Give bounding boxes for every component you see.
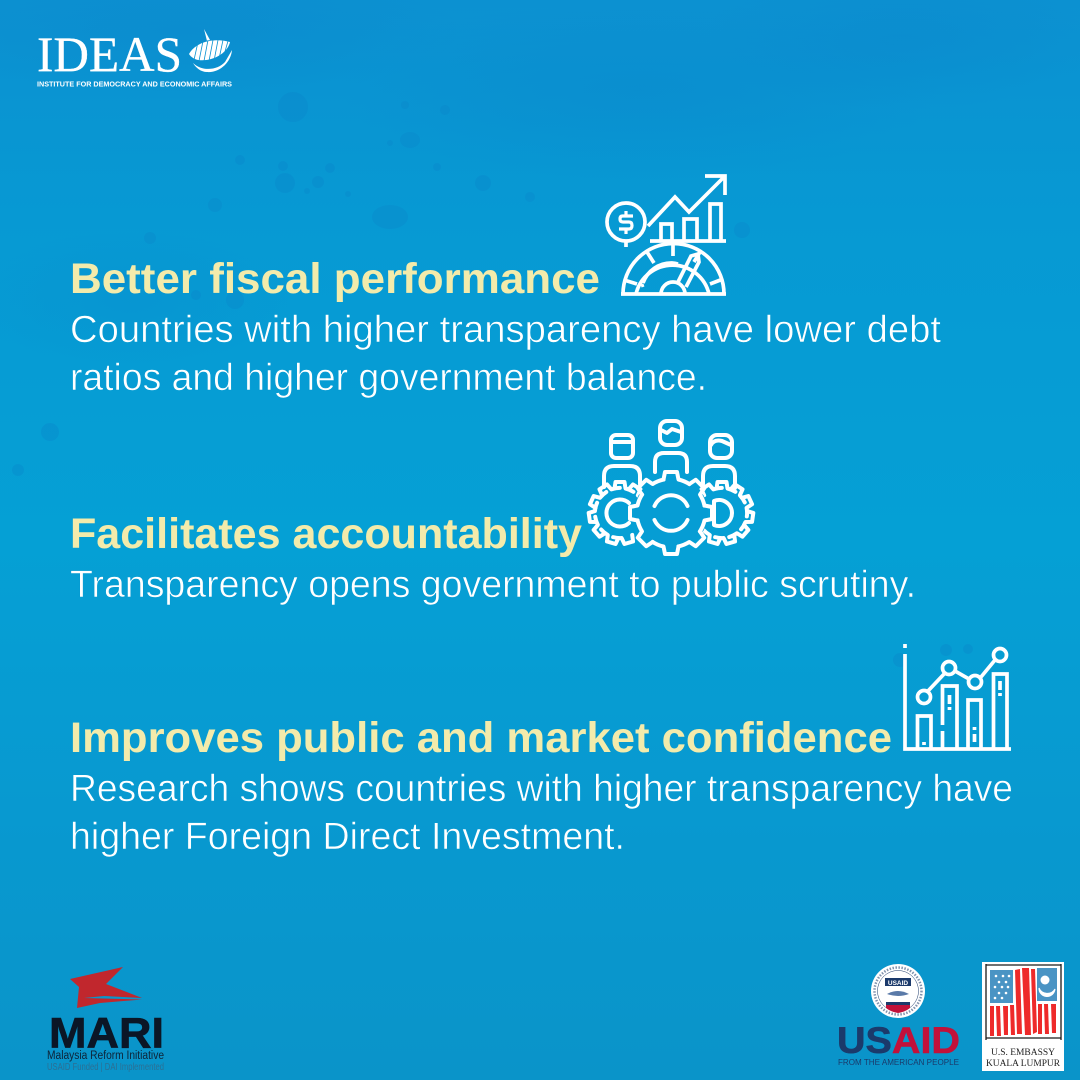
logo emblem (189, 29, 232, 72)
subtitle: Malaysia Reform Initiative (47, 1050, 164, 1062)
body: Transparency opens government to public scrutiny. (70, 564, 916, 606)
heading: Improves public and market confidence (70, 714, 892, 762)
tagline: FROM THE AMERICAN PEOPLE (838, 1057, 959, 1067)
body line 1: Countries with higher transparency have lower debt (70, 309, 941, 351)
heading: Facilitates accountability (70, 510, 582, 558)
trend line (928, 660, 995, 691)
dollar coin (607, 203, 645, 247)
gauge (621, 243, 726, 294)
wordmark: USAID (837, 1020, 960, 1061)
logo: U.S. Embassy Kuala Lumpur (982, 962, 1064, 1071)
icon: line and bar chart (905, 644, 1011, 749)
bar marks (924, 681, 1000, 745)
left person (604, 435, 640, 487)
logo: IDEAS (37, 26, 232, 88)
logo: USAID (837, 964, 960, 1067)
centre person (655, 421, 687, 472)
embassy name line 2: KUALA LUMPUR (986, 1059, 1061, 1069)
icon: money growth and gauge (607, 176, 726, 294)
heading: Better fiscal performance (70, 255, 600, 303)
icon: team and gears (587, 421, 756, 555)
bars (650, 204, 726, 241)
seal: USAID (888, 980, 908, 987)
body line 2: higher Foreign Direct Investment. (70, 816, 625, 858)
embassy name line 1: U.S. EMBASSY (991, 1048, 1055, 1058)
section 2: facilitates accountability (70, 510, 916, 606)
right gear (700, 480, 756, 547)
wordmark: MARI (49, 1010, 164, 1058)
flag artwork (986, 964, 1061, 1040)
rising arrow (648, 176, 725, 226)
bars (918, 674, 1007, 749)
logo tagline: INSTITUTE FOR DEMOCRACY AND ECONOMIC AFFAIRS (37, 80, 232, 88)
logo: MARI (47, 967, 164, 1073)
left gear (587, 480, 648, 547)
right person (703, 435, 735, 488)
section 1: better fiscal performance (70, 255, 941, 399)
logo: IDEAS: IDEAS (37, 26, 182, 82)
body line 2: ratios and higher government balance. (70, 357, 707, 399)
funding line: USAID Funded | DAI Implemented (47, 1062, 164, 1073)
body line 1: Research shows countries with higher transparency have (70, 768, 1013, 810)
centre gear (629, 471, 713, 555)
axes (905, 644, 1011, 749)
section 3: improves public and market confidence (70, 714, 1013, 858)
flag (70, 967, 142, 1008)
